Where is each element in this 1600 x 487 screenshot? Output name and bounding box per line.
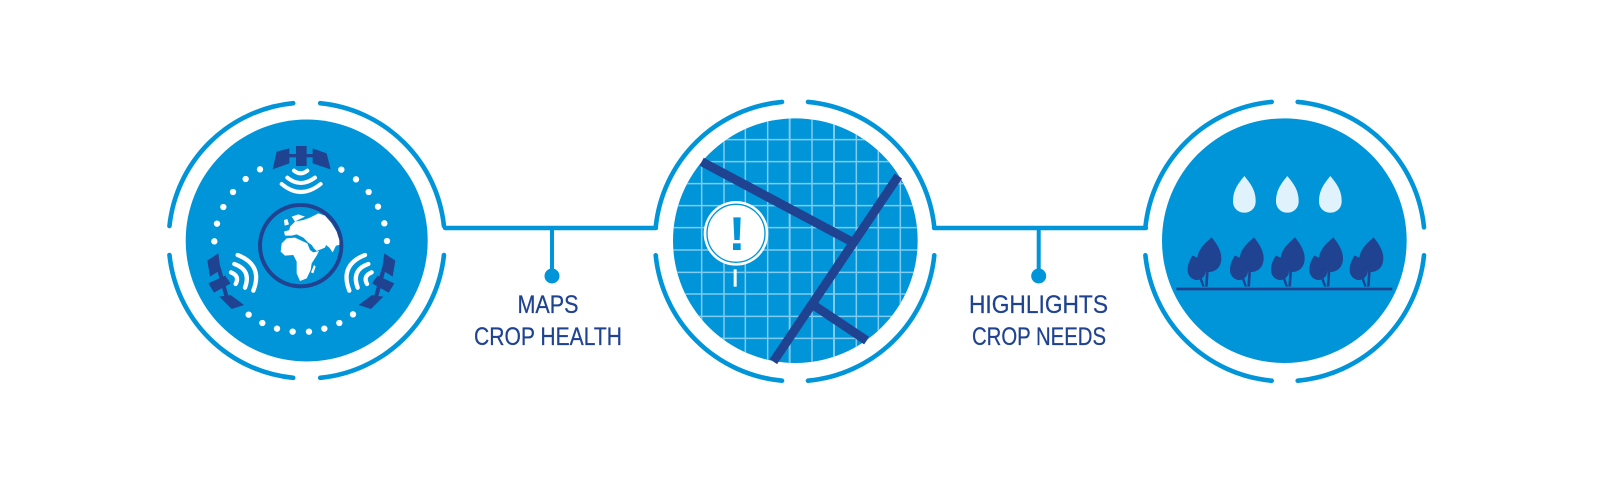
icon: alert marker bbox=[704, 201, 768, 287]
stem and dot: highlights crop needs bbox=[1031, 228, 1046, 284]
map disk with grid bbox=[668, 113, 922, 367]
icon: water drops bbox=[1233, 176, 1342, 213]
stem and dot: maps crop health bbox=[544, 228, 560, 284]
panel: field map bbox=[656, 102, 934, 381]
icon: right satellite bbox=[347, 253, 395, 309]
label: highlights crop needs: CROP NEEDS bbox=[972, 323, 1106, 351]
panel: crop needs bbox=[1145, 102, 1424, 381]
label: maps crop health: MAPS bbox=[518, 291, 578, 319]
connector: line between second and third circles bbox=[934, 226, 1146, 230]
outer ring bbox=[656, 102, 934, 381]
blue disk bbox=[186, 120, 428, 362]
icon: plants bbox=[1188, 237, 1383, 287]
outer ring bbox=[169, 103, 444, 378]
ground line bbox=[1176, 288, 1392, 290]
blue disk bbox=[1162, 118, 1407, 363]
label: highlights crop needs bbox=[969, 291, 1108, 351]
connector: line between first and second circles bbox=[445, 226, 656, 230]
label: highlights crop needs: HIGHLIGHTS bbox=[969, 291, 1108, 319]
icon: top satellite bbox=[273, 146, 331, 192]
icon: left satellite bbox=[207, 253, 256, 309]
map roads bbox=[702, 162, 898, 362]
panel: satellite monitoring bbox=[169, 103, 444, 378]
orbit dots bbox=[211, 166, 390, 335]
outer ring bbox=[1145, 102, 1424, 381]
label: maps crop health bbox=[474, 291, 622, 351]
label: maps crop health: CROP HEALTH bbox=[474, 323, 622, 351]
icon: globe bbox=[260, 205, 341, 286]
